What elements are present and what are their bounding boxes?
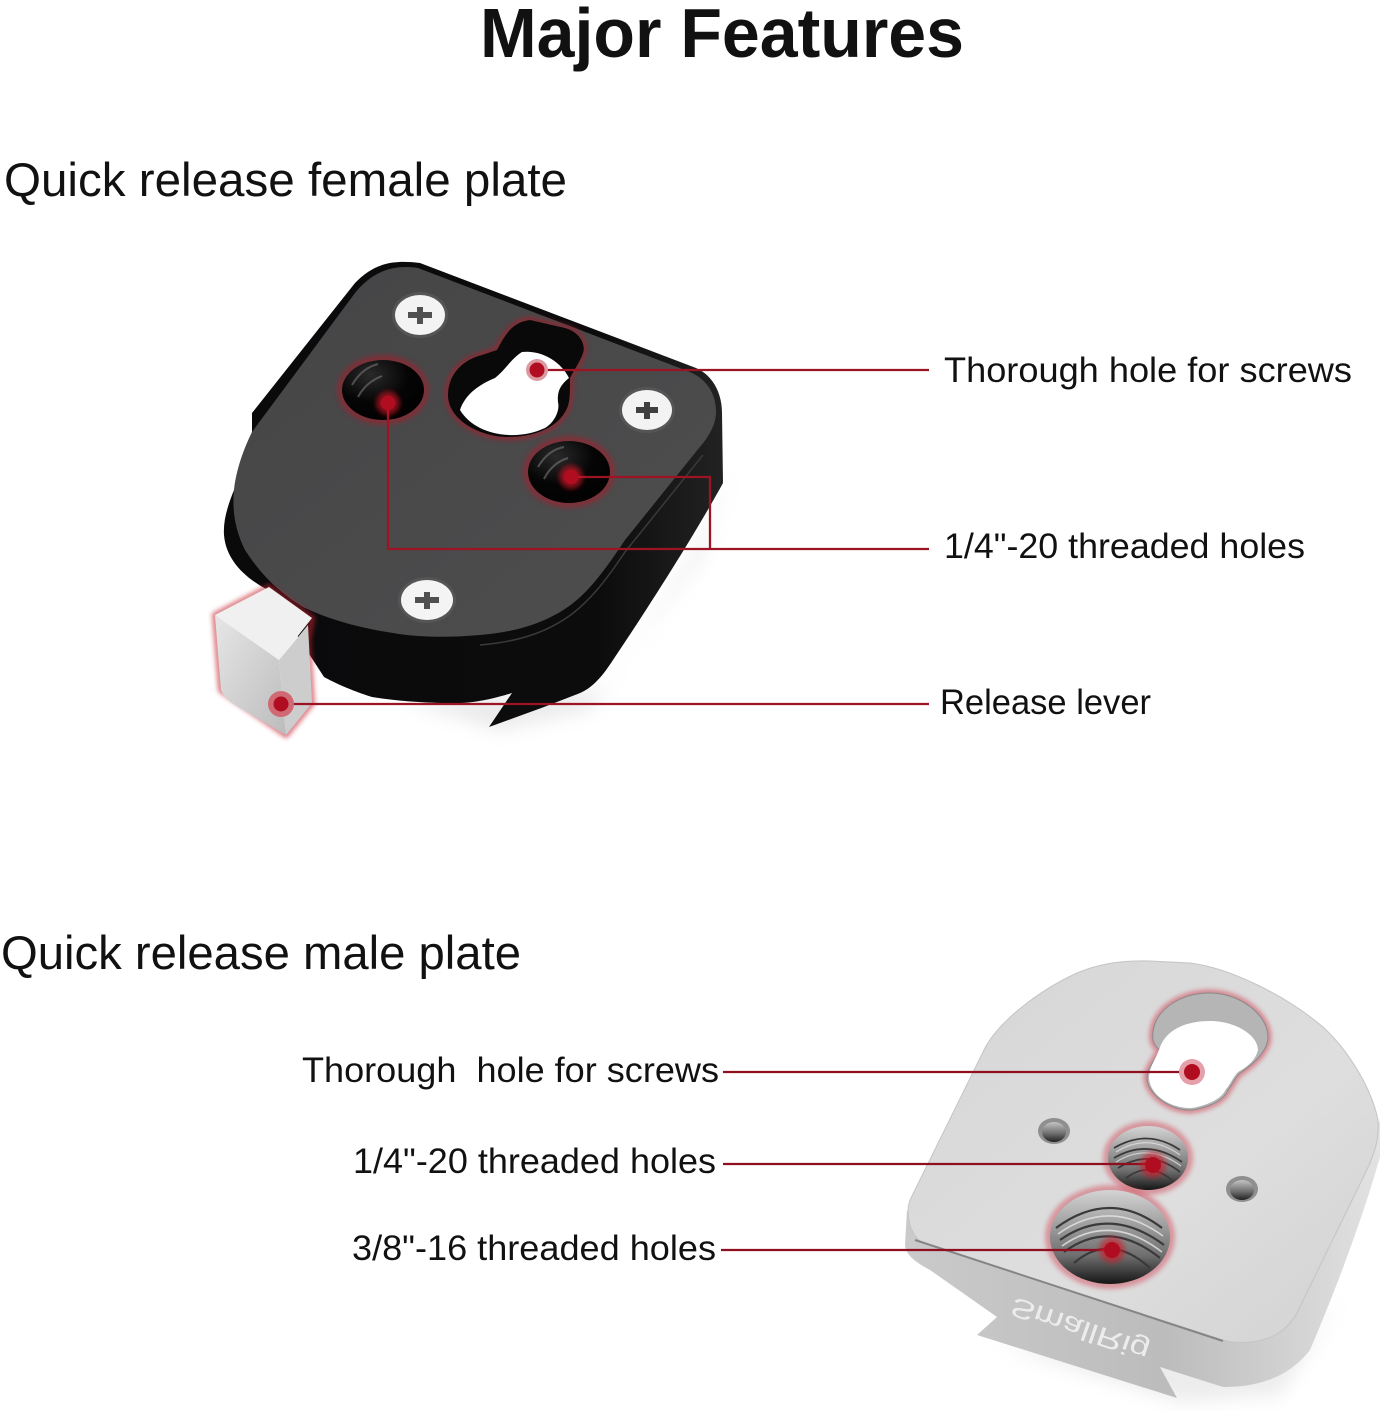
heading: quick release male plate: Quick release male plate <box>1 926 521 979</box>
threaded hole 3/8-16 <box>1045 1185 1175 1289</box>
heading: quick release female plate: Quick release female plate <box>4 153 567 206</box>
label: 3/8-16 threaded holes (male): 3/8"-16 threaded holes <box>352 1229 716 1268</box>
front edge shadow <box>915 1240 1223 1341</box>
small screw hole right <box>1226 1176 1258 1202</box>
black body <box>224 262 723 727</box>
plate side and tab <box>905 1120 1380 1398</box>
engraved logo: SmallRig <box>1007 1291 1153 1366</box>
screw: top <box>392 292 448 338</box>
label: thorough hole for screws (female): Thorough hole for screws <box>944 351 1352 390</box>
threaded hole right <box>523 436 615 508</box>
callout lines: female plate <box>281 370 929 704</box>
threaded hole 1/4-20 <box>1103 1121 1193 1195</box>
label: thorough hole for screws (male): Thorough hole for screws <box>302 1051 719 1090</box>
keyhole through hole <box>1147 993 1268 1110</box>
threaded hole left <box>337 355 429 425</box>
panel: female plate product <box>215 262 730 735</box>
panel: male plate product <box>905 961 1380 1402</box>
label: release lever: Release lever <box>940 683 1151 722</box>
release lever glow <box>215 587 312 735</box>
soft shadow <box>400 470 730 730</box>
edge highlight <box>480 455 703 645</box>
keyhole glow <box>448 320 584 437</box>
label: 1/4-20 threaded holes (female): 1/4"-20 threaded holes <box>944 527 1305 566</box>
small screw hole left <box>1038 1118 1070 1144</box>
label: 1/4-20 threaded holes (male): 1/4"-20 threaded holes <box>353 1142 716 1181</box>
keyhole white opening <box>460 352 569 435</box>
keyhole glow <box>1147 993 1268 1110</box>
callout lines: male plate <box>721 1072 1192 1250</box>
callout dots: male plate <box>1099 1059 1205 1263</box>
callout dots: female plate <box>268 359 583 717</box>
plate top face <box>908 961 1378 1342</box>
screw: right <box>619 387 675 433</box>
soft shadow <box>1000 1300 1340 1402</box>
keyhole through hole <box>448 320 584 437</box>
gray top face <box>233 267 716 637</box>
screw: bottom <box>398 577 456 623</box>
release lever <box>215 587 312 735</box>
